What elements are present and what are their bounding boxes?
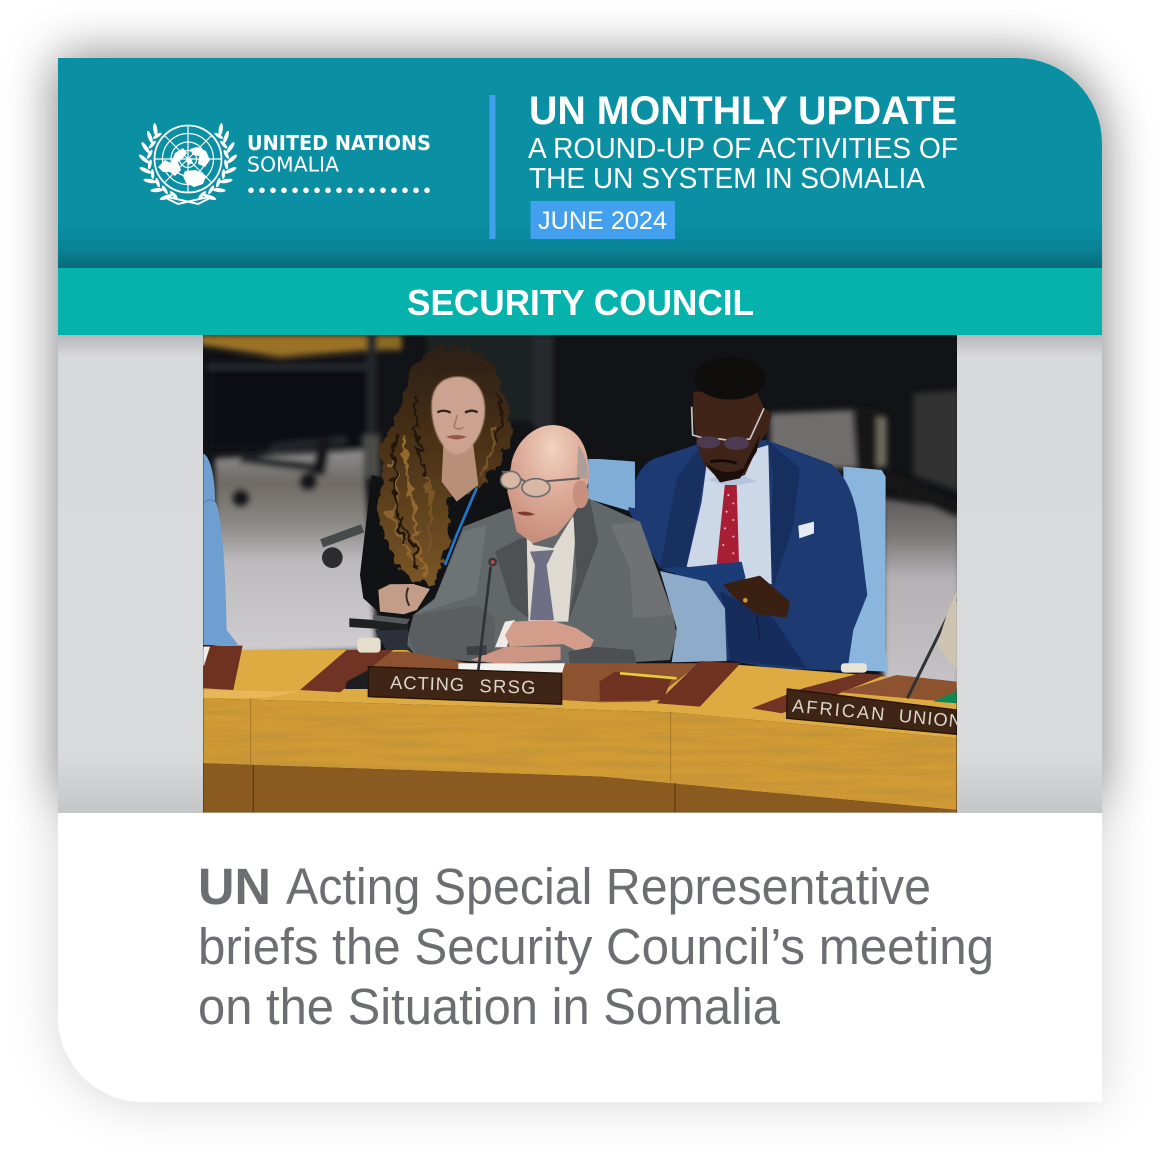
logo text (247, 131, 431, 176)
nameplate: Acting SRSG: SRSG (479, 675, 536, 698)
woman behind the speaker (360, 345, 513, 614)
council desk (203, 558, 963, 815)
headline (198, 858, 994, 1035)
headline line 1: UN (198, 858, 271, 915)
continents (158, 147, 210, 187)
curly hair (375, 345, 513, 586)
room background (200, 335, 553, 655)
headline line 3: on the Situation in Somalia (198, 978, 781, 1035)
wreath: right branch (198, 123, 238, 201)
headline line 2: briefs the Security Council’s meeting (198, 918, 994, 975)
photo: Security Council briefing (200, 335, 963, 815)
man reading documents (628, 357, 867, 671)
nameplate: African Union (787, 689, 963, 734)
date badge: JUNE 2024 (538, 207, 667, 235)
speaker: Acting SRSG (407, 425, 677, 666)
country name: SOMALIA (247, 152, 339, 176)
title: UN MONTHLY UPDATE (529, 89, 957, 133)
desk items (203, 646, 243, 690)
panel: grey photo backdrop (58, 334, 1102, 812)
nameplate: Acting SRSG: ACTING (390, 672, 464, 695)
page graphics (138, 95, 991, 1024)
globe (154, 125, 222, 193)
nameplate: African Union: AFRICAN (791, 695, 885, 724)
subtitle line 1: A ROUND-UP OF ACTIVITIES OF (528, 133, 958, 165)
dotted rule (248, 188, 430, 193)
section heading: SECURITY COUNCIL (407, 282, 754, 323)
panel: header background (58, 58, 1102, 268)
left blue chair (203, 453, 238, 645)
organisation name: UNITED NATIONS (247, 131, 431, 155)
wreath tie (166, 197, 210, 204)
nameplate: Acting SRSG (368, 667, 562, 704)
date badge (530, 201, 675, 239)
emblem: United Nations logo (138, 123, 238, 204)
subtitle line 2: THE UN SYSTEM IN SOMALIA (529, 163, 926, 195)
vertical accent bar (490, 95, 496, 239)
panel: section band (58, 268, 1102, 334)
nameplate: African Union: UNION (898, 705, 963, 732)
wreath: left branch (138, 123, 178, 201)
chairs (588, 459, 629, 511)
headline line 1: Acting Special Representative (286, 858, 931, 915)
